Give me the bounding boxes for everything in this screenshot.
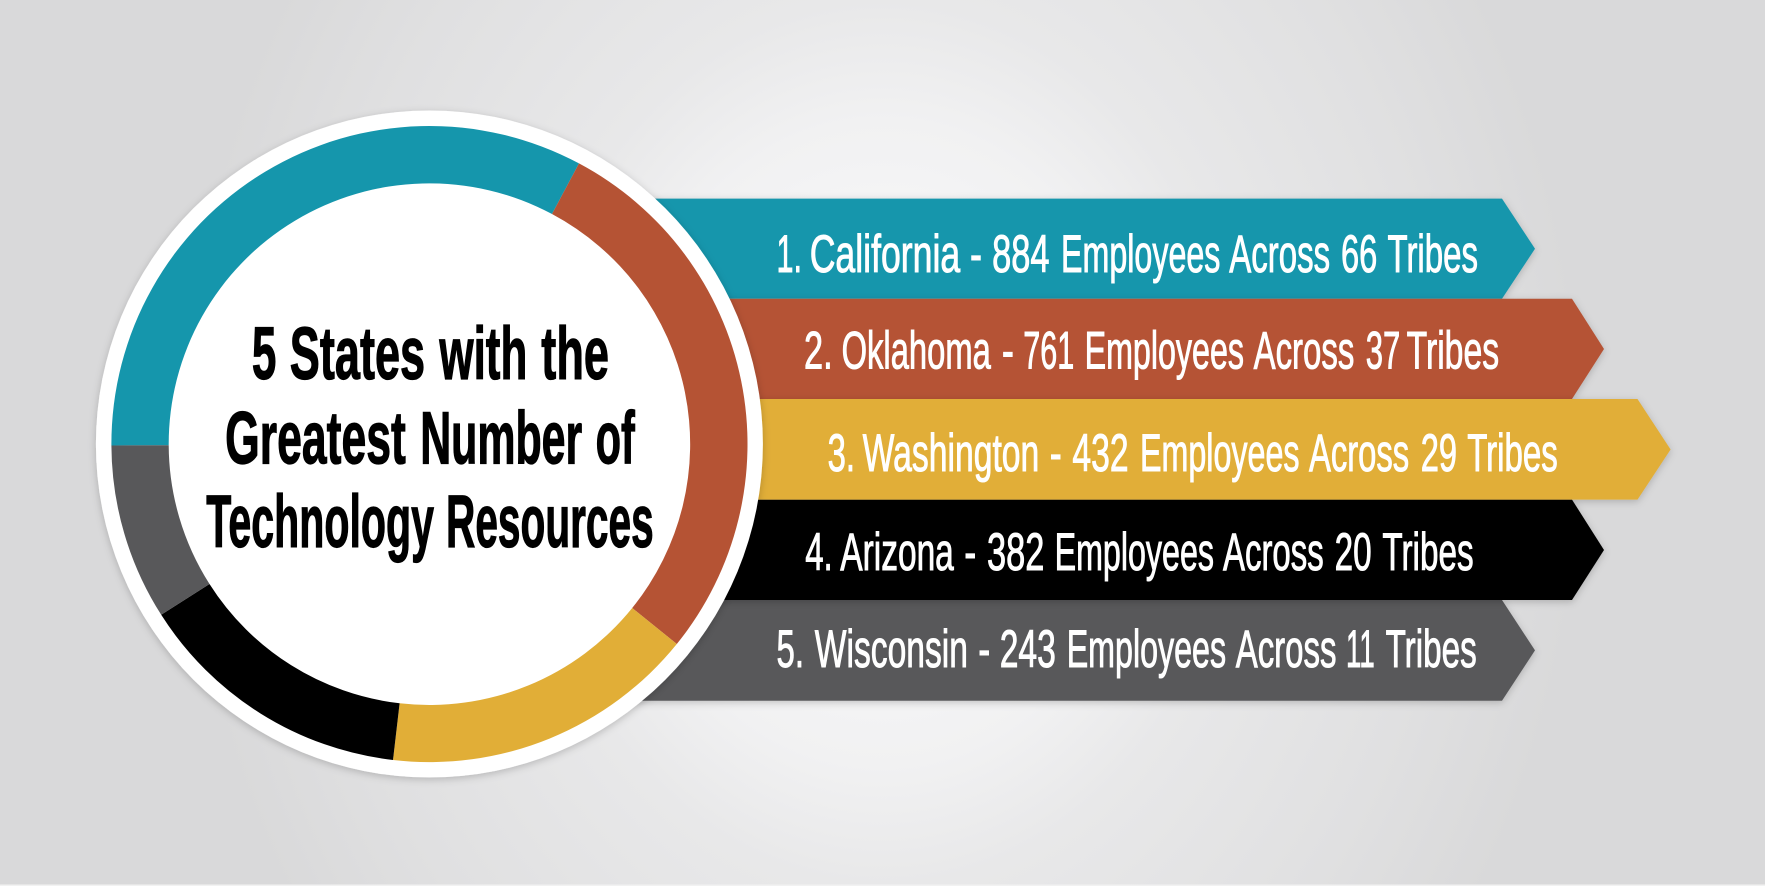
bar 3: Washington: 432 (1072, 424, 1129, 483)
segment: Oklahoma (552, 163, 748, 644)
arrow bars list (600, 199, 1671, 701)
bar 2: Oklahoma: Employees (1085, 322, 1244, 381)
bar 1: California: Across (1229, 225, 1330, 284)
bar 2: Oklahoma (650, 299, 1604, 399)
bar 3: Washington (650, 399, 1671, 500)
bar 3: Washington: Employees (1140, 424, 1300, 483)
segment: Wisconsin (111, 445, 210, 615)
bar 2: Oklahoma: 37 (1366, 322, 1400, 381)
bar 5: Wisconsin: 243 (1000, 620, 1056, 679)
bar 5: Wisconsin: Wisconsin (815, 620, 968, 679)
bar 3: Washington: - (1050, 424, 1062, 483)
bar 5: Wisconsin: 11 (1346, 620, 1375, 679)
bar 2: Oklahoma: - (1002, 322, 1014, 381)
title: with (439, 312, 527, 395)
bar 2: Oklahoma: 2. (804, 322, 833, 381)
bar 1: California: 884 (992, 225, 1050, 284)
bar 5: Wisconsin: Across (1236, 620, 1336, 679)
title: Technology (206, 480, 434, 563)
bar 5: Wisconsin: 5. (776, 620, 804, 679)
title (206, 312, 654, 563)
bar 1: California: Employees (1061, 225, 1220, 284)
donut chart with title (96, 110, 763, 778)
bar 4: Arizona: 4. (805, 523, 833, 582)
bar 4: Arizona: 382 (987, 523, 1044, 582)
title: Resources (446, 480, 654, 563)
segment: Arizona (161, 584, 400, 760)
white outer disc (96, 110, 763, 778)
bar 2: Oklahoma: Tribes (1407, 322, 1499, 381)
bar 4: Arizona: - (964, 523, 976, 582)
bar 1: California: 1. (776, 225, 802, 284)
bar 4: Arizona: Employees (1055, 523, 1214, 582)
title: the (541, 312, 609, 395)
title: Greatest (225, 396, 406, 480)
bar 3: Washington: Across (1309, 424, 1409, 483)
bar 4: Arizona: 20 (1335, 523, 1372, 582)
bar 5: Wisconsin: Employees (1067, 620, 1226, 679)
bar 3: Washington: 3. (828, 424, 855, 483)
bar 4: Arizona: Arizona (840, 523, 954, 582)
bar 1: California: - (970, 225, 982, 284)
bar 2: Oklahoma: Oklahoma (842, 322, 991, 381)
title: 5 (252, 312, 276, 395)
bar 2: Oklahoma: 761 (1023, 322, 1074, 381)
bar 5: Wisconsin: Tribes (1386, 620, 1477, 679)
bar 5: Wisconsin: - (978, 620, 990, 679)
bar 3: Washington: Tribes (1467, 424, 1558, 483)
bar 1: California (600, 199, 1535, 299)
bar 1: California: California (810, 225, 961, 284)
bar 1: California: 66 (1341, 225, 1377, 284)
bar 4: Arizona (650, 500, 1604, 600)
title: Number (420, 396, 582, 480)
title: States (290, 312, 425, 395)
bar 1: California: Tribes (1388, 225, 1478, 284)
bar 2: Oklahoma: Across (1254, 322, 1354, 381)
bar 3: Washington: Washington (863, 424, 1039, 483)
title: of (596, 396, 635, 480)
bar 5: Wisconsin (600, 600, 1535, 701)
bar 4: Arizona: Tribes (1382, 523, 1474, 582)
segment: Washington (393, 608, 677, 762)
bar 4: Arizona: Across (1223, 523, 1324, 582)
segment: California (111, 126, 579, 445)
bar 3: Washington: 29 (1421, 424, 1457, 483)
